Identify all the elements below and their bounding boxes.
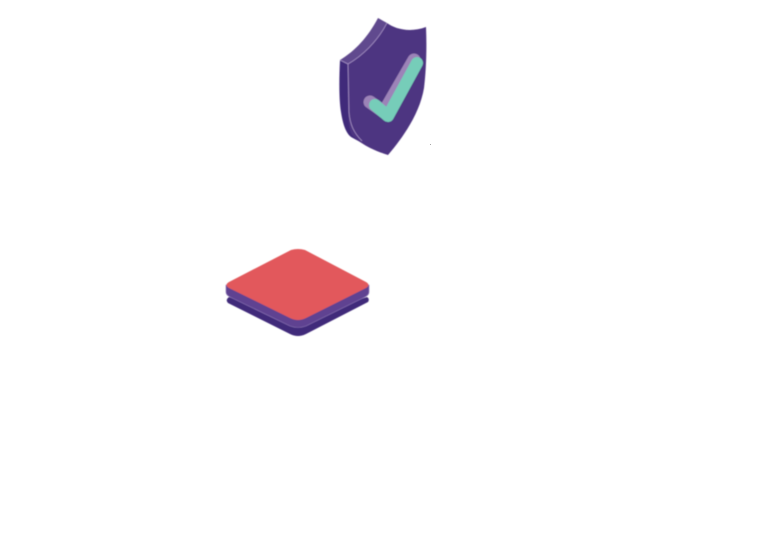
shield front face <box>348 23 426 155</box>
shield highlight edges <box>340 23 387 141</box>
middle layer <box>226 285 369 328</box>
icon: layered platform <box>226 249 369 336</box>
red top face <box>226 249 368 320</box>
check mark shadow <box>370 60 414 112</box>
speck <box>430 144 431 145</box>
lower layer <box>227 297 369 336</box>
icon: shield with check mark <box>339 18 426 155</box>
shield top bevel <box>340 18 387 64</box>
check mark <box>375 63 417 116</box>
shield side face <box>339 60 362 143</box>
